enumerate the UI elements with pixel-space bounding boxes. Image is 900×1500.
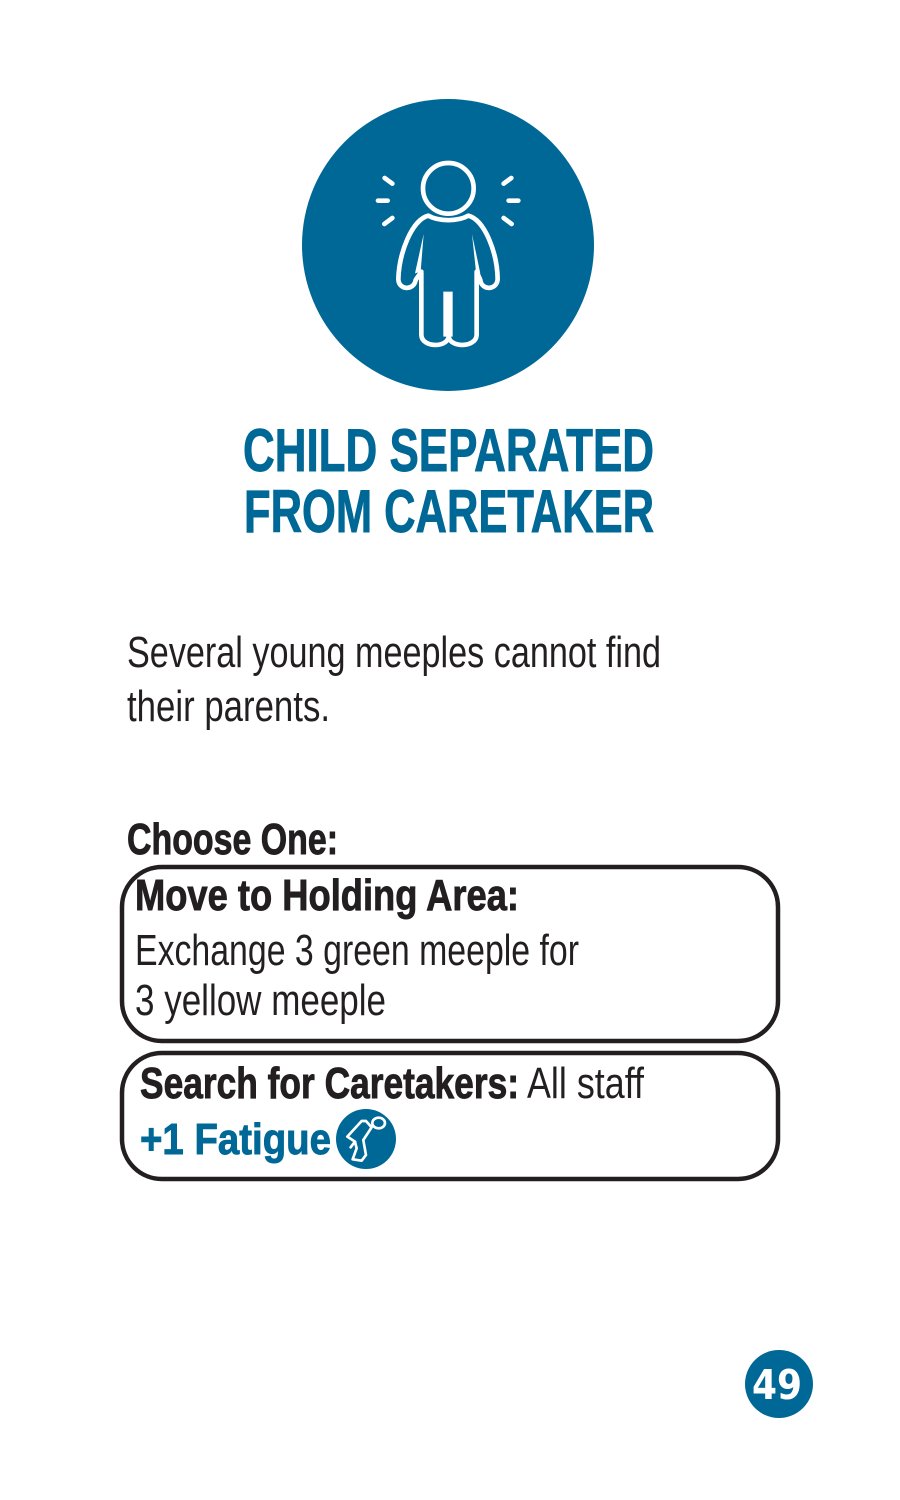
page number (745, 1350, 813, 1418)
panel: move to holding area: Move to Holding Area: (135, 871, 519, 920)
panel: search for caretakers: +1 Fatigue (140, 1115, 331, 1164)
page number: 49 (752, 1361, 802, 1409)
panel: move to holding area (122, 867, 778, 1041)
intro text: Several young meeples cannot find (127, 628, 661, 677)
title: CHILD SEPARATED (243, 417, 654, 484)
heading: choose one: Choose One: (127, 815, 338, 864)
icon: fatigue (336, 1109, 396, 1169)
panel: search for caretakers: All staff (527, 1059, 645, 1108)
intro text: their parents. (127, 682, 330, 731)
panel: search for caretakers (122, 1053, 778, 1179)
icon: child with alert marks in circle (302, 99, 594, 391)
panel: search for caretakers: Search for Caretakers: (140, 1059, 519, 1108)
intro text (127, 628, 661, 731)
title: FROM CARETAKER (244, 478, 654, 545)
panel: move to holding area: 3 yellow meeple (135, 976, 386, 1025)
title (243, 417, 654, 545)
panel: move to holding area: Exchange 3 green meeple for (135, 926, 579, 975)
